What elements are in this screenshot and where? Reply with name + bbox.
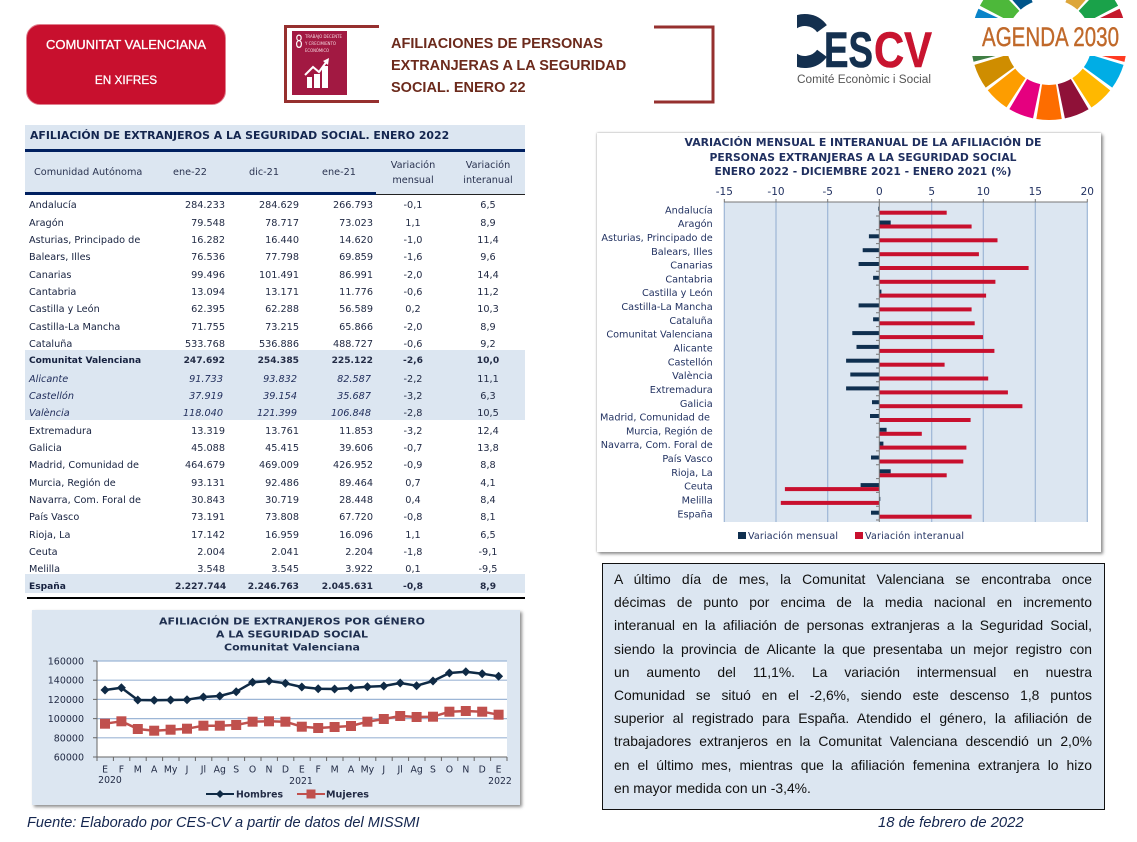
table data rows: 86.991 [339, 270, 373, 281]
table data rows: 11,2 [477, 287, 499, 298]
table data rows: 28.448 [339, 495, 373, 506]
x axis labels: S [233, 764, 239, 776]
table data rows: 6,5 [480, 530, 496, 541]
title [391, 36, 626, 96]
table data rows: Balears, Illes [29, 252, 91, 263]
table data rows: 2.246.763 [248, 582, 299, 592]
category labels: Melilla [682, 496, 713, 506]
line: Hombres [105, 672, 499, 700]
table data rows: 37.919 [189, 391, 223, 402]
table data rows: 0,1 [405, 564, 421, 575]
table data rows: 93.832 [263, 374, 297, 385]
icon: Agenda 2030 wheel [972, 0, 1126, 120]
table data rows: 8,4 [480, 495, 496, 506]
legend [206, 790, 369, 800]
table data rows: 469.009 [259, 460, 299, 471]
date note: 18 de febrero de 2022 [878, 815, 1024, 831]
table data rows: 9,6 [480, 252, 496, 263]
table data rows: 13.319 [191, 426, 225, 437]
text block: commentary: Comunidad se situó en el -2,6%, siendo este descenso 1,8 puntos [614, 687, 1092, 703]
panel: monthly and year-on-year bar chart [597, 133, 1101, 552]
table data rows: 0,4 [405, 495, 421, 506]
table data rows: 11,4 [477, 235, 499, 246]
chart title: AFILIACIÓN DE EXTRANJEROS POR GÉNERO [159, 614, 425, 628]
table data rows: 284.233 [185, 200, 225, 211]
table title band: AFILIACIÓN DE EXTRANJEROS A LA SEGURIDAD SOCIAL. ENERO 2022 [30, 129, 449, 142]
table data rows: Extremadura [29, 426, 92, 437]
table column header: ene-22 [173, 167, 207, 178]
x axis labels: My [361, 764, 375, 776]
top axis labels: 10 [977, 186, 990, 198]
bars: variación mensual [846, 207, 891, 515]
table data rows: -9,1 [479, 547, 497, 558]
table data rows: 10,5 [477, 408, 499, 419]
table data rows: -2,6 [403, 356, 423, 366]
highlight band: España [25, 574, 525, 593]
table data rows: 16.440 [265, 235, 299, 246]
table data rows: 56.589 [339, 304, 373, 315]
table data rows: 73.215 [265, 322, 299, 333]
table data rows: 73.023 [339, 218, 373, 229]
x axis labels: M [331, 764, 339, 776]
table data rows: 1,1 [405, 530, 421, 541]
y axis labels [48, 656, 84, 764]
table data rows: -0,6 [404, 339, 422, 350]
table data rows: 2.045.631 [322, 582, 373, 592]
top axis labels [716, 186, 1094, 198]
text block: commentary: trabajadores extranjeros en la Comunitat Valenciana descendió un 2,0% [614, 733, 1092, 749]
table data rows: 13.761 [265, 426, 299, 437]
table data rows: 10,0 [477, 356, 499, 366]
table column header: mensual [392, 175, 434, 186]
text block: commentary: A último día de mes, la Comunitat Valenciana se encontraba once [614, 571, 1092, 587]
table title band [25, 125, 525, 149]
table data rows: Madrid, Comunidad de [29, 460, 139, 471]
category labels: Castilla y León [642, 287, 713, 299]
chart title [159, 614, 425, 654]
icon: SDG 8 decent work tile with left bracket frame: ECONÓMICO [305, 47, 329, 54]
highlight band: Comunitat Valenciana [25, 350, 525, 420]
zero axis [876, 202, 879, 522]
x axis labels: 2020 [98, 775, 122, 786]
x axis labels: E [496, 764, 502, 776]
title: SOCIAL. ENERO 22 [391, 80, 526, 96]
table data rows: 4,1 [480, 478, 496, 489]
category labels: Ceuta [684, 482, 713, 493]
x axis labels: N [462, 764, 469, 776]
table data rows: 78.717 [265, 218, 299, 229]
table data rows: 16.959 [265, 530, 299, 541]
table data rows: 247.692 [184, 356, 225, 366]
table data rows: 3.545 [271, 564, 299, 575]
table data rows: 0,7 [405, 478, 421, 489]
category labels: País Vasco [662, 453, 713, 465]
table data rows: 35.687 [337, 391, 371, 402]
table data rows: Galicia [29, 443, 62, 454]
table data rows: 73.191 [191, 512, 225, 523]
text block: commentary: décimas de punto por encima de la media nacional en incremento [614, 594, 1092, 610]
table: afiliación de extranjeros [25, 125, 525, 599]
x axis labels: S [430, 764, 436, 776]
legend: Hombres [236, 790, 283, 800]
table column header [25, 149, 525, 195]
legend [738, 531, 964, 542]
bracket: right side of title frame [654, 26, 714, 104]
table data rows: 92.486 [265, 478, 299, 489]
table data rows: 488.727 [333, 339, 373, 350]
table data rows: 3.548 [197, 564, 225, 575]
chart title: PERSONAS EXTRANJERAS A LA SEGURIDAD SOCIAL [710, 152, 1017, 164]
table data rows: 13,8 [477, 443, 499, 454]
category labels: València [672, 370, 713, 382]
table data rows: 39.606 [339, 443, 373, 454]
table data rows: 76.536 [191, 252, 225, 263]
x axis labels: J [185, 764, 188, 776]
icon: SDG 8 decent work tile with left bracket frame: TRABAJO DECENTE [304, 34, 342, 40]
category labels: Andalucía [665, 204, 713, 216]
x axis labels: M [134, 764, 142, 776]
table data rows: -2,0 [404, 270, 422, 281]
table data rows: 93.131 [191, 478, 225, 489]
text block: commentary: en el último mes, mientras que la afiliación femenina extranjera lo hizo [614, 756, 1092, 772]
x axis labels: Ag [214, 764, 226, 776]
table data rows: 16.282 [191, 235, 225, 246]
y axis labels: 80000 [54, 733, 84, 744]
table data rows: Cataluña [29, 339, 72, 350]
x axis labels: D [479, 764, 486, 776]
top axis labels: -15 [716, 186, 733, 198]
table column header: Comunidad Autónoma [34, 167, 142, 178]
table data rows: España [29, 582, 66, 592]
x axis labels: 2021 [289, 776, 313, 787]
table data rows: 8,9 [480, 582, 496, 592]
table column header: Variación [466, 160, 510, 171]
table data rows: 14,4 [477, 270, 499, 281]
text block: commentary: en mayor medida con un -3,4%. [614, 780, 811, 796]
table data rows: 426.952 [333, 460, 373, 471]
table data rows: 16.096 [339, 530, 373, 541]
table data rows: -0,8 [404, 512, 422, 523]
text block: commentary: un aumento del 11,1%. La variación intermensual en nuestra [614, 664, 1092, 680]
table data rows: Cantabria [29, 287, 76, 298]
table data rows: València [29, 408, 70, 419]
table data rows: 6,5 [480, 200, 496, 211]
x axis labels: Jl [397, 764, 403, 776]
table data rows: 2.041 [271, 547, 299, 558]
title: AFILIACIONES DE PERSONAS [391, 36, 603, 52]
category labels: Balears, Illes [651, 247, 713, 258]
table column header: interanual [463, 175, 513, 186]
table data rows: Murcia, Región de [29, 478, 116, 489]
legend: Variación interanual [865, 531, 964, 542]
table data rows: 121.399 [257, 408, 297, 419]
table data rows: 99.496 [191, 270, 225, 281]
table data rows: Aragón [29, 218, 64, 229]
table data rows: 266.793 [333, 200, 373, 211]
plot area with gridlines [724, 199, 1088, 522]
table data rows: 8,1 [480, 512, 496, 523]
table data rows: 73.808 [265, 512, 299, 523]
category labels: Galicia [680, 399, 713, 410]
line: Mujeres [105, 711, 499, 731]
table data rows: 533.768 [185, 339, 225, 350]
table column header: Variación [391, 160, 435, 171]
table data rows: Castilla y León [29, 304, 100, 315]
table data rows: 13.171 [265, 287, 299, 298]
category labels: Rioja, La [671, 468, 713, 479]
chart title: Comunitat Valenciana [224, 642, 360, 654]
table data rows: 69.859 [339, 252, 373, 263]
table data rows: 71.755 [191, 322, 225, 333]
category labels: España [677, 509, 713, 520]
table data rows: 118.040 [183, 408, 223, 419]
table data rows: -3,2 [404, 426, 422, 437]
top axis labels: -5 [822, 186, 833, 198]
chart title: A LA SEGURIDAD SOCIAL [216, 630, 369, 640]
table data rows: 8,9 [480, 218, 496, 229]
text block: commentary: interanual en la afiliación de personas extranjeras a la Seguridad Social, [614, 617, 1092, 633]
table data rows: 2.227.744 [175, 582, 226, 592]
table data rows: 11.776 [339, 287, 373, 298]
legend: Variación mensual [748, 531, 838, 542]
top axis labels: -10 [767, 186, 785, 198]
x axis labels: D [282, 764, 289, 776]
table data rows: 11.853 [339, 426, 373, 437]
table data rows: -0,1 [404, 200, 422, 211]
y axis labels: 60000 [54, 752, 84, 764]
table data rows [28, 200, 499, 592]
title: EXTRANJERAS A LA SEGURIDAD [391, 58, 626, 74]
icon: SDG 8 decent work tile with left bracket frame: Y CRECIMIENTO [304, 41, 336, 47]
table data rows: -2,8 [404, 408, 422, 419]
panel: gender line chart [32, 610, 520, 805]
x axis labels: My [164, 764, 178, 776]
table data rows: 67.720 [339, 512, 373, 523]
x axis labels: F [119, 764, 124, 776]
table data rows: 65.866 [339, 322, 373, 333]
category labels: Asturias, Principado de [601, 233, 713, 244]
badge: Comunitat Valenciana en xifres: EN XIFRES [95, 73, 157, 87]
table data rows: Melilla [29, 564, 60, 575]
table column header: ene-21 [322, 167, 356, 178]
source note: Fuente: Elaborado por CES-CV a partir de datos del MISSMI [27, 815, 420, 831]
table data rows: 536.886 [259, 339, 299, 350]
logo: CES CV: ES [824, 22, 873, 78]
x axis labels: Jl [200, 764, 206, 776]
table data rows: Andalucía [29, 200, 77, 211]
bars: variación interanual [781, 211, 1029, 519]
category labels: Canarias [670, 261, 713, 272]
table data rows: 6,3 [480, 391, 496, 402]
x axis labels: 2022 [488, 776, 512, 787]
chart title: ENERO 2022 - DICIEMBRE 2021 - ENERO 2021 (%) [714, 166, 1012, 178]
y axis labels: 100000 [48, 714, 84, 725]
table data rows: Asturias, Principado de [29, 235, 140, 246]
table data rows: -0,8 [403, 582, 423, 592]
icon: SDG 8 decent work tile with left bracket frame: 8 [296, 32, 302, 53]
logo: CES CV: Comité Econòmic i Social [797, 74, 931, 86]
icon: SDG 8 decent work tile with left bracket frame [284, 25, 379, 103]
table data rows: 106.848 [331, 408, 371, 419]
category labels [600, 204, 713, 520]
category labels: Comunitat Valenciana [606, 330, 713, 341]
y axis labels: 120000 [48, 695, 84, 706]
category labels: Castilla-La Mancha [621, 302, 713, 313]
badge: Comunitat Valenciana en xifres [26, 24, 226, 105]
table data rows: Alicante [29, 374, 68, 385]
x axis labels: E [299, 764, 305, 776]
category labels: Madrid, Comunidad de [600, 413, 710, 424]
table data rows: 2.004 [197, 547, 225, 558]
category labels: Aragón [678, 218, 713, 230]
table data rows: 45.088 [191, 443, 225, 454]
table data rows: Comunitat Valenciana [29, 356, 141, 366]
x axis labels: N [266, 764, 273, 776]
y axis labels: 140000 [48, 676, 84, 687]
table data rows: -0,7 [404, 443, 422, 454]
table data rows: 3.922 [345, 564, 373, 575]
x axis labels [98, 764, 512, 787]
x axis labels: F [316, 764, 321, 776]
table data rows: 2.204 [345, 547, 373, 558]
chart title: VARIACIÓN MENSUAL E INTERANUAL DE LA AFILIACIÓN DE [684, 136, 1042, 149]
text block: commentary [602, 563, 1105, 810]
y axis labels: 160000 [48, 656, 84, 668]
table data rows: 284.629 [259, 200, 299, 211]
table column header: dic-21 [249, 167, 279, 178]
table data rows: País Vasco [29, 512, 79, 523]
table data rows: 101.491 [259, 270, 299, 281]
text block: commentary: siendo la provincia de Alicante la que presentaba un mejor registro con [614, 641, 1092, 657]
x axis labels: Ag [410, 764, 423, 776]
top axis labels: 15 [1029, 186, 1042, 198]
table data rows: -1,0 [404, 235, 422, 246]
table data rows: -0,6 [404, 287, 422, 298]
table data rows: Canarias [29, 270, 71, 281]
table data rows: 82.587 [337, 374, 371, 385]
table data rows: 10,3 [477, 304, 499, 315]
category labels: Cantabria [665, 274, 713, 285]
plot area with gridlines [93, 661, 507, 761]
table data rows: 9,2 [480, 339, 496, 350]
table data rows: Ceuta [29, 547, 58, 558]
table data rows: 79.548 [191, 218, 225, 229]
table data rows: 8,8 [480, 460, 496, 471]
category labels: Cataluña [669, 316, 713, 327]
category labels: Navarra, Com. Foral de [601, 440, 713, 451]
table data rows: 45.415 [265, 443, 299, 454]
x axis labels: O [249, 764, 256, 776]
table data rows: -1,6 [404, 252, 422, 263]
table data rows: 39.154 [263, 391, 297, 402]
table data rows: 254.385 [258, 356, 299, 366]
table data rows: 91.733 [189, 374, 223, 385]
top axis labels: 20 [1081, 186, 1094, 198]
table bottom rule [27, 597, 525, 599]
table data rows: 0,2 [405, 304, 421, 315]
table data rows: 30.843 [191, 495, 225, 506]
text block: commentary: superior al registrado para España. Atendido el género, la afiliación de [614, 710, 1092, 726]
table data rows: 89.464 [339, 478, 373, 489]
category labels: Castellón [668, 356, 713, 368]
x axis labels: A [348, 764, 355, 776]
badge: Comunitat Valenciana en xifres: COMUNITAT VALENCIANA [46, 37, 206, 52]
table data rows: Castilla-La Mancha [29, 322, 120, 333]
table data rows: -3,2 [404, 391, 422, 402]
table data rows: -2,2 [404, 374, 422, 385]
table data rows: -2,0 [404, 322, 422, 333]
table data rows: Navarra, Com. Foral de [29, 495, 141, 506]
x axis labels: O [446, 764, 453, 776]
x axis labels: J [381, 764, 385, 776]
table data rows: Castellón [29, 391, 74, 402]
chart title [684, 136, 1042, 178]
table data rows: 225.122 [332, 356, 373, 366]
category labels: Alicante [674, 344, 713, 354]
top axis labels: 0 [876, 186, 883, 198]
table data rows: Rioja, La [29, 530, 70, 541]
table data rows: 11,1 [477, 374, 499, 385]
table data rows: 14.620 [339, 235, 373, 246]
table data rows: 12,4 [477, 426, 499, 437]
table data rows: 17.142 [191, 530, 225, 541]
table data rows: 464.679 [185, 460, 225, 471]
table data rows: 77.798 [265, 252, 299, 263]
legend: Mujeres [326, 790, 369, 800]
table data rows: -0,9 [404, 460, 422, 471]
table data rows: 13.094 [191, 287, 225, 298]
table data rows: -1,8 [404, 547, 422, 558]
top axis labels: 5 [928, 186, 935, 198]
table data rows: 62.395 [191, 304, 225, 315]
x axis labels: A [151, 764, 158, 776]
category labels: Extremadura [650, 385, 713, 396]
table data rows: 8,9 [480, 322, 496, 333]
table data rows: 30.719 [265, 495, 299, 506]
table data rows: -9,5 [479, 564, 497, 575]
table data rows: 62.288 [265, 304, 299, 315]
x axis labels: E [102, 764, 108, 776]
category labels: Murcia, Región de [626, 425, 713, 437]
logo: CES CV [797, 14, 933, 86]
table data rows: 1,1 [405, 218, 421, 229]
